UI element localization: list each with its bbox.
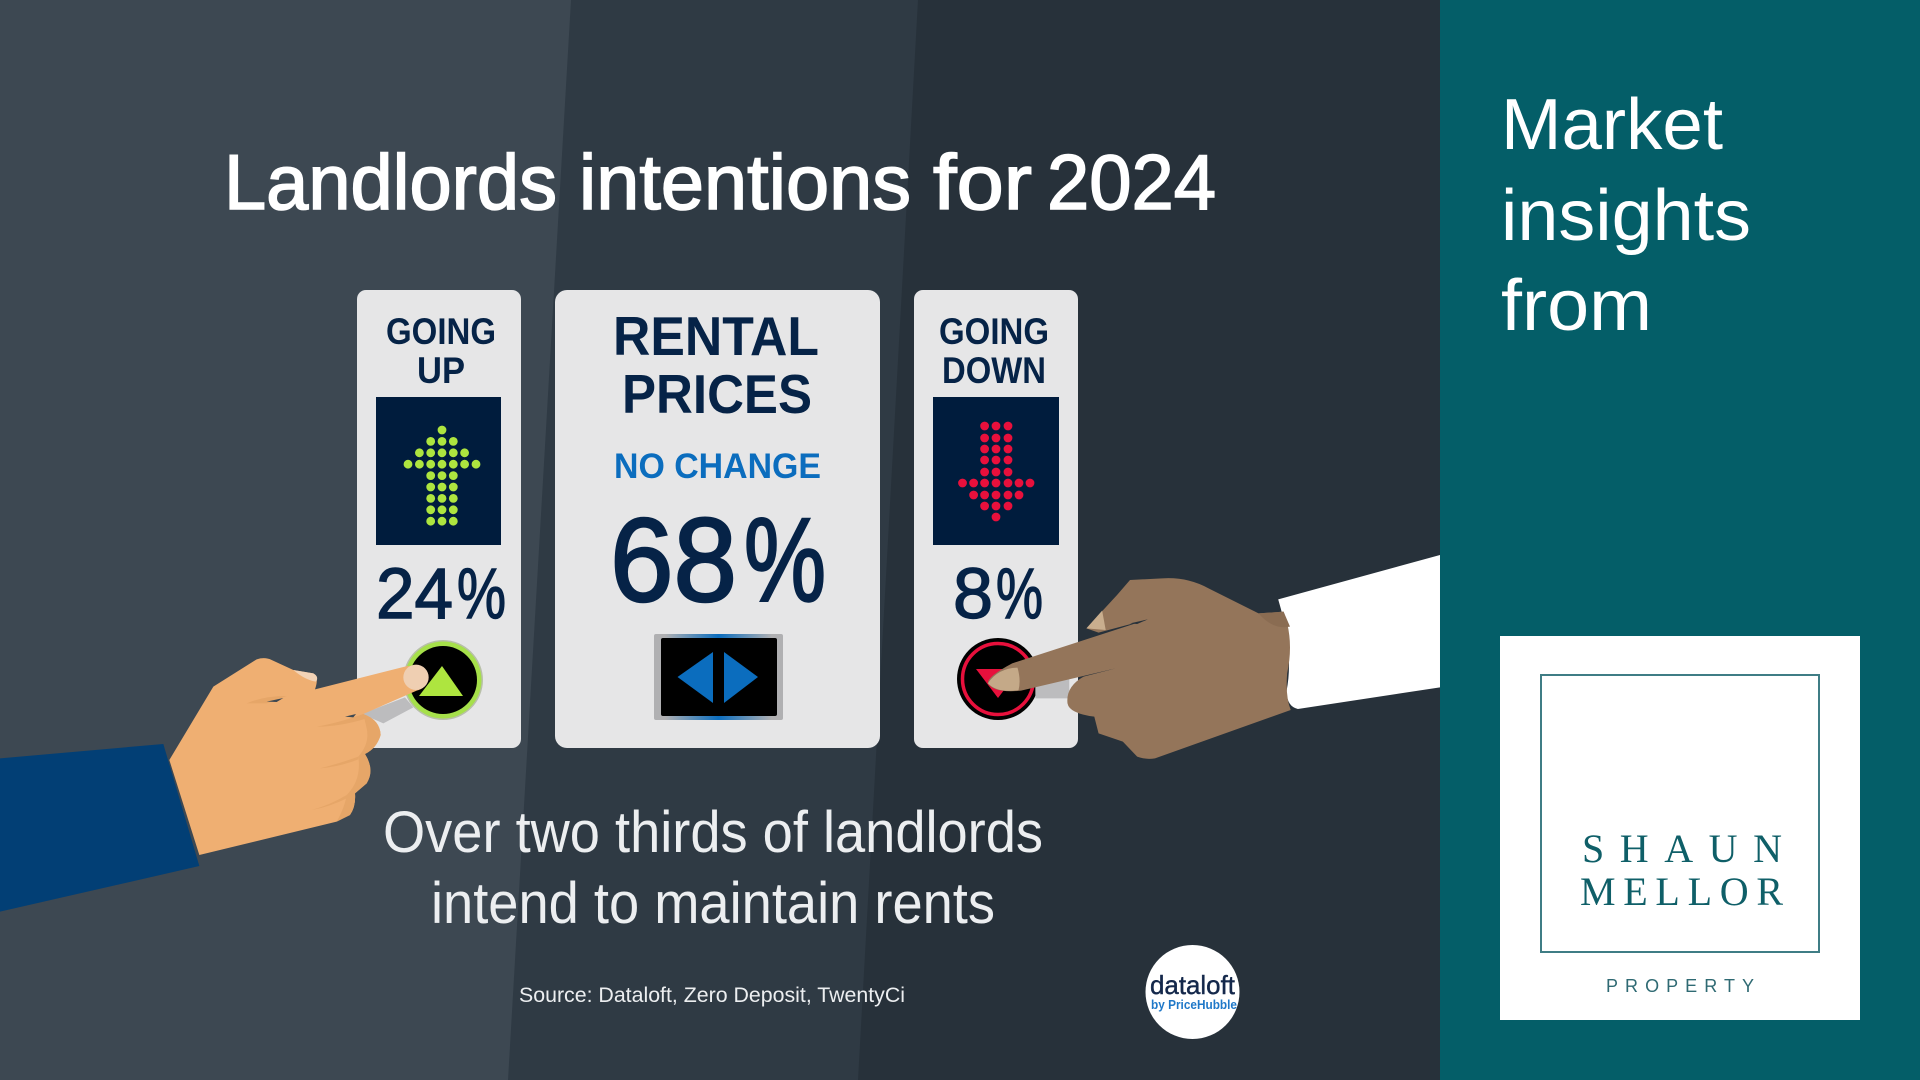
button shadow <box>362 697 413 723</box>
value: 24% <box>376 555 506 634</box>
button: down <box>957 638 1039 720</box>
background panel with slanted bands <box>0 0 1440 1080</box>
shaun mellor property logo: SHAUN <box>1582 826 1782 871</box>
subtitle <box>383 800 1043 936</box>
value: 8%: 8 <box>953 555 993 634</box>
button: no change <box>654 634 783 720</box>
led screen: down arrow <box>933 397 1059 545</box>
panel: rental prices <box>555 290 880 748</box>
sidebar heading: market insights from: insights <box>1501 176 1751 256</box>
sleeve: blue <box>0 744 199 912</box>
left hand pressing up button <box>0 658 429 912</box>
title: for <box>933 138 1032 226</box>
heading: going down: GOING <box>939 311 1049 352</box>
hand: dark skin <box>988 578 1291 759</box>
sleeve: white <box>1278 555 1440 709</box>
heading: going down: DOWN <box>942 350 1046 391</box>
value: 8%: % <box>996 555 1043 634</box>
heading: going up <box>386 311 496 391</box>
shaun mellor property logo: MELLOR <box>1580 869 1783 914</box>
label: no change: NO CHANGE <box>614 447 821 486</box>
source note: Source: Dataloft, Zero Deposit, TwentyCi <box>519 984 905 1007</box>
panel: going down <box>914 290 1078 748</box>
title: 2024 <box>1047 138 1216 226</box>
dataloft logo: by PriceHubble <box>1151 998 1237 1012</box>
dataloft logo <box>1146 945 1240 1039</box>
sidebar heading: market insights from: Market <box>1501 85 1723 165</box>
panel: teal sidebar <box>1440 0 1920 1080</box>
heading: going down <box>939 311 1049 391</box>
value: 24%: % <box>457 555 506 634</box>
value: 8% <box>953 555 1043 634</box>
dataloft logo: dataloft <box>1150 970 1236 1000</box>
title: intentions <box>579 138 911 226</box>
button: up <box>403 640 483 720</box>
sidebar heading: market insights from <box>1501 85 1751 346</box>
shaun mellor property logo: PROPERTY <box>1606 976 1754 996</box>
subtitle: intend to maintain rents <box>431 871 995 936</box>
led screen: up arrow <box>376 397 501 545</box>
title <box>224 138 1216 226</box>
heading: rental prices <box>613 305 819 425</box>
value: 24%: 24 <box>376 555 453 634</box>
value: 68% <box>610 494 826 627</box>
heading: rental prices: PRICES <box>622 363 812 425</box>
heading: going up: UP <box>417 350 465 391</box>
value: 68%: % <box>744 494 826 627</box>
title: Landlords <box>224 138 557 226</box>
heading: going up: GOING <box>386 311 496 352</box>
heading: rental prices: RENTAL <box>613 305 819 367</box>
button shadow <box>1035 676 1069 698</box>
panel: going up <box>357 290 521 748</box>
subtitle: Over two thirds of landlords <box>383 800 1043 865</box>
right hand pressing down button <box>988 555 1440 759</box>
value: 68%: 68 <box>610 494 737 627</box>
sidebar heading: market insights from: from <box>1501 266 1652 346</box>
hand: light skin <box>169 658 429 855</box>
shaun mellor property logo <box>1500 636 1860 1020</box>
